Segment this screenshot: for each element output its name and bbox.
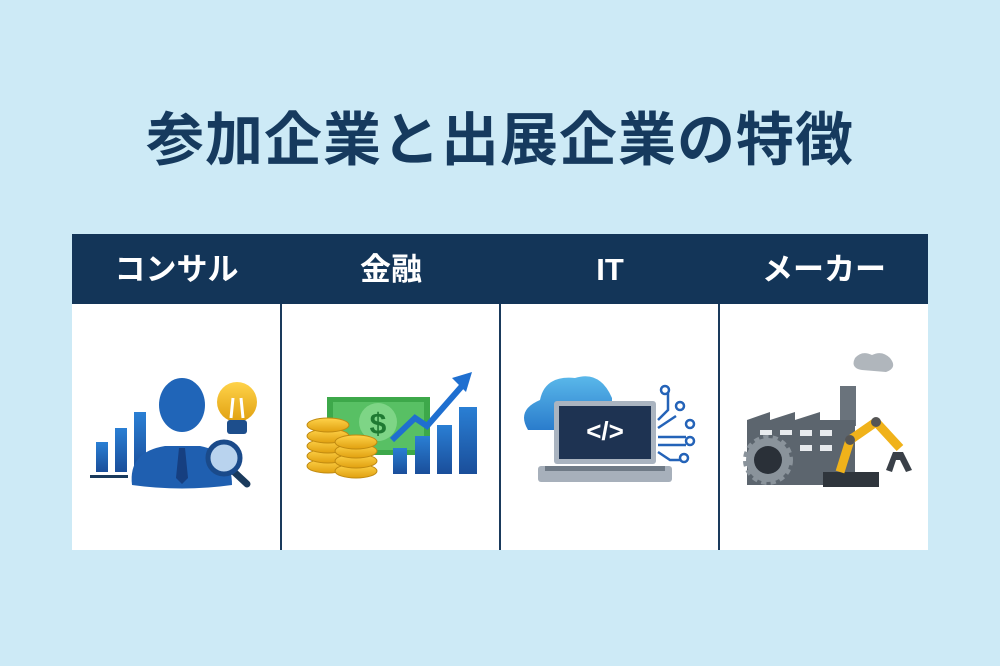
table [72,234,928,550]
title: 参加企業と出展企業の特徴 [146,108,854,173]
header: finance: 金融 [360,252,422,287]
header: consulting: コンサル [114,252,238,287]
header: IT: IT [596,252,624,287]
icon: consulting [90,378,257,488]
icon: manufacturer [746,353,912,487]
header row [72,234,928,304]
header: maker: メーカー [762,252,886,287]
icon: finance: $ [370,408,387,441]
icon: IT [524,376,694,482]
icon: finance [307,372,477,478]
icon: IT: </> [586,416,624,446]
